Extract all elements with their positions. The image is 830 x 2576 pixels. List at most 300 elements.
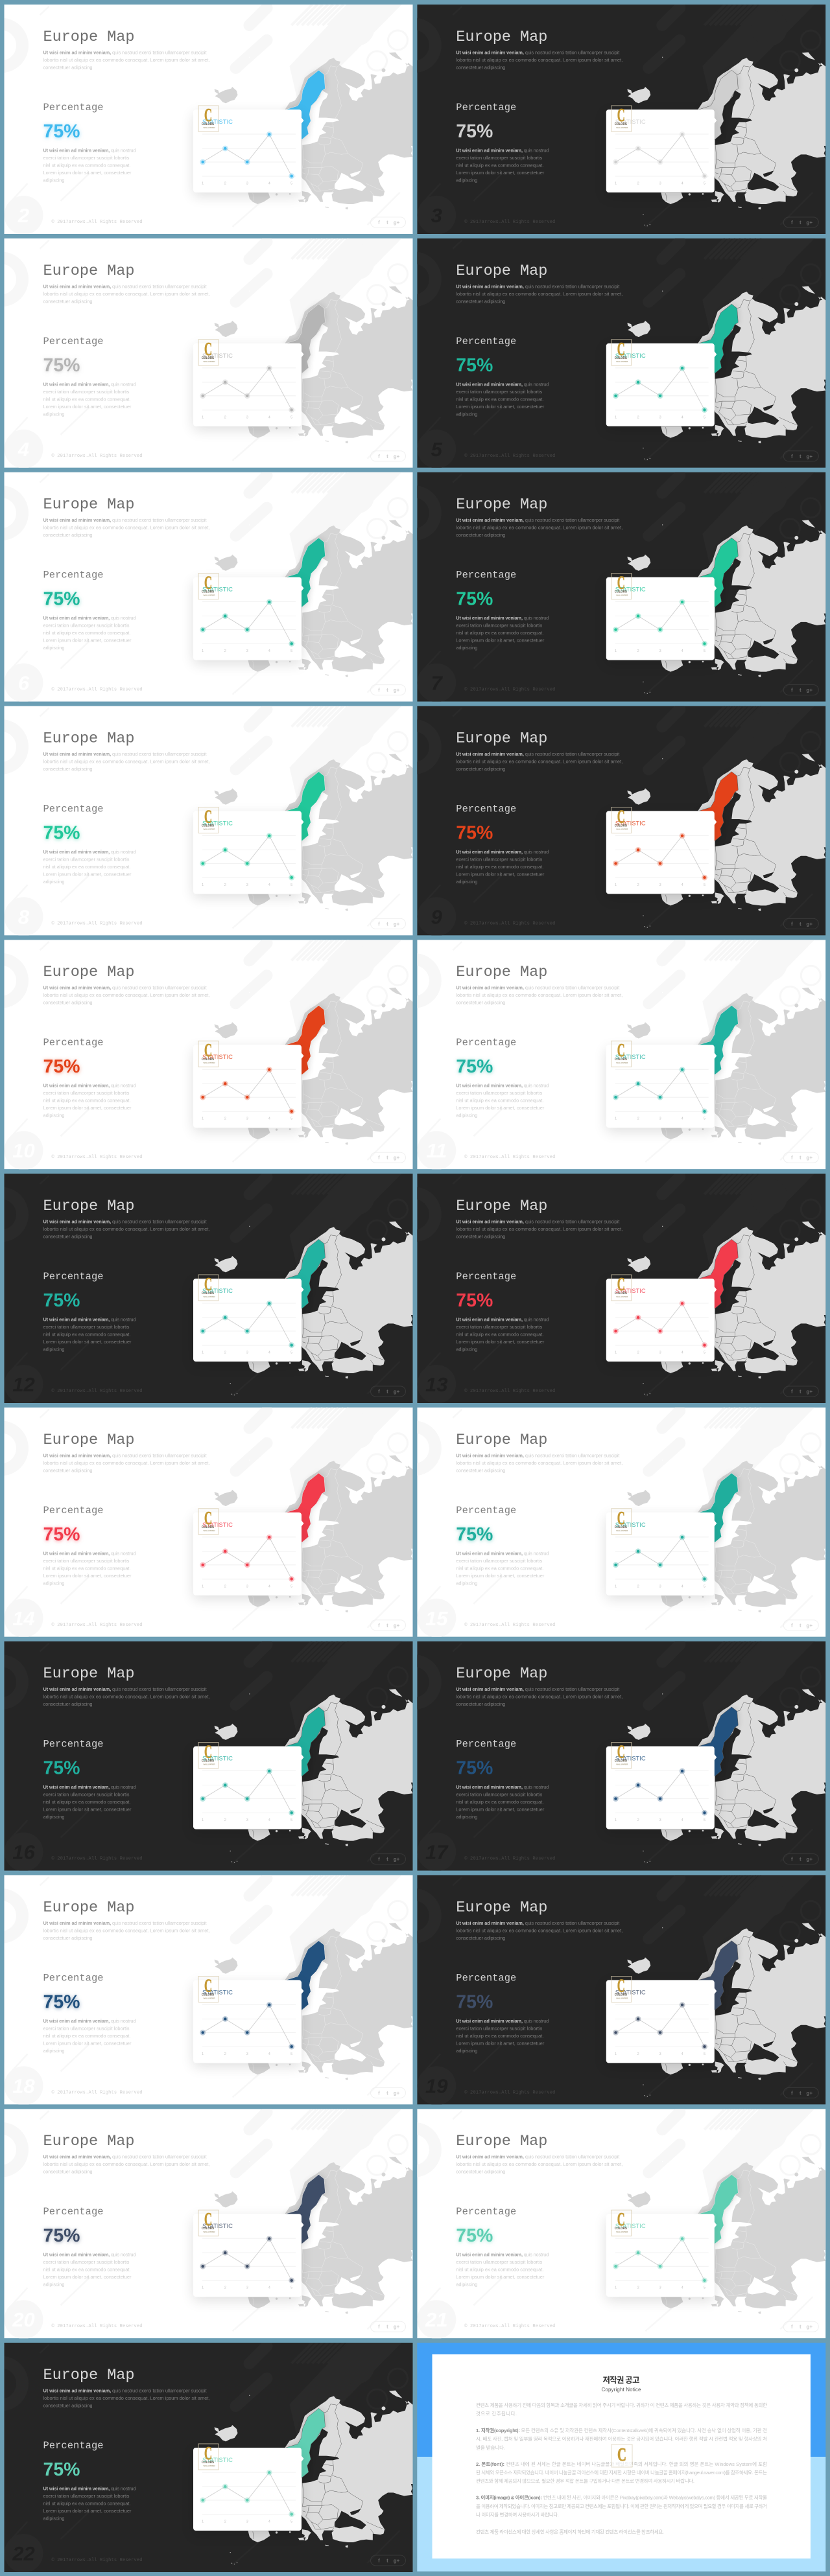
card: statistic chart [193,105,303,196]
social icons: f [791,220,793,226]
intro text: lobortis nisl ut aliquip ex ea commodo consequat. Lorem ipsum dolor sit amet, [43,525,210,531]
card: statistic chart: 3 [246,1351,248,1354]
social icons: f [791,2324,793,2330]
intro text [456,2154,622,2175]
percentage value: 75% [456,589,493,610]
card: statistic chart: 5 [704,2052,706,2056]
card: statistic chart: 3 [246,1818,248,1822]
card: statistic chart: STATISTIC [202,1756,233,1763]
description [43,381,136,417]
card: statistic chart: 1 [615,883,617,887]
intro text: Ut wisi enim ad minim veniam, quis nostrud exerci tation ullamcorper suscipit [43,1686,206,1692]
logo watermark [611,1274,632,1301]
logo watermark: COLORS [615,1759,627,1763]
intro text: Ut wisi enim ad minim veniam, quis nostrud exerci tation ullamcorper suscipit [43,49,206,56]
logo watermark [611,573,632,599]
slide 22: dark, mint [0,2343,413,2573]
slide 6: light, teal [0,472,413,702]
card: statistic chart: 1 [202,2052,204,2056]
description: Ut wisi enim ad minim veniam, quis nostrud [456,2252,549,2258]
card: statistic chart: 5 [290,181,292,185]
intro text: consectetuer adipiscing [456,532,505,538]
social icons: t [386,688,388,693]
social icons: g+ [807,1623,812,1629]
card: statistic chart: 3 [246,181,248,185]
intro text [43,985,210,1006]
page number: 14 [12,1607,35,1630]
description: Lorem ipsum dolor sit amet, consectetuer [43,404,132,410]
notice body text: 나 이미지를 변경하여 사용하시기 바랍니다. [476,2511,559,2518]
subheading: Percentage [43,1505,104,1516]
page number: 7 [431,672,444,695]
logo watermark: WALLPAPER [204,360,215,363]
description: exerci tation ullamcorper suscipit lobortis [456,155,543,161]
intro text: consectetuer adipiscing [456,1234,505,1239]
logo watermark: C [204,1975,212,1996]
description: nisl ut aliquip ex ea commodo consequat. [456,630,543,636]
intro text: Ut wisi enim ad minim veniam, quis nostrud exerci tation ullamcorper suscipit [456,1452,619,1458]
description: exerci tation ullamcorper suscipit lobortis [43,2259,130,2265]
logo watermark: WALLPAPER [616,1997,628,1999]
logo watermark: COLORS [202,2461,215,2465]
card: statistic chart: 5 [290,2052,292,2056]
card: statistic chart: 4 [682,2052,683,2056]
intro text [456,1686,622,1707]
heading: Europe Map [43,496,135,514]
social icons: g+ [807,2324,812,2330]
social icons: t [800,2324,801,2330]
logo watermark: WALLPAPER [616,828,628,830]
description: exerci tation ullamcorper suscipit lobortis [43,623,130,629]
subheading: Percentage [43,1739,104,1750]
slide 14: light, red [0,1408,413,1638]
intro text [456,985,622,1006]
card: statistic chart: STATISTIC [615,1522,646,1529]
description: exerci tation ullamcorper suscipit lobortis [43,856,130,862]
card: statistic chart: 1 [202,883,204,887]
description: exerci tation ullamcorper suscipit lobortis [456,1792,543,1798]
subheading: Percentage [43,336,104,347]
card: statistic chart: 2 [637,415,639,419]
social icons [371,217,406,227]
description: Ut wisi enim ad minim veniam, quis nostrud [43,615,136,621]
footer copyright: © 2017arrows.All Rights Reserved [464,1856,555,1862]
heading: Europe Map [43,29,135,46]
social icons: t [800,2090,801,2096]
description: exerci tation ullamcorper suscipit lobortis [456,856,543,862]
intro text: Ut wisi enim ad minim veniam, quis nostrud exerci tation ullamcorper suscipit [43,2154,206,2160]
logo watermark [198,105,219,132]
heading: Europe Map [456,262,547,280]
card: statistic chart: STATISTIC [202,353,233,360]
percentage value: 75% [456,1524,493,1545]
panel: copyright notice [417,2343,825,2571]
subheading: Percentage [456,570,516,581]
description: nisl ut aliquip ex ea commodo consequat. [456,2033,543,2039]
social icons: t [386,1389,388,1395]
footer copyright: © 2017arrows.All Rights Reserved [464,920,555,926]
social icons: f [791,1155,793,1161]
description [43,2486,136,2521]
icon: Europe map with Sweden highlighted [627,1923,825,2097]
description [456,849,549,885]
intro text: Ut wisi enim ad minim veniam, quis nostrud exerci tation ullamcorper suscipit [43,1218,206,1225]
description [43,1317,136,1352]
description: nisl ut aliquip ex ea commodo consequat. [43,1331,131,1338]
social icons: g+ [807,220,812,226]
heading: Europe Map [43,730,135,747]
intro text [43,283,210,304]
logo watermark: WALLPAPER [616,1763,628,1766]
social icons [371,685,406,695]
logo watermark: C [204,573,212,594]
social icons: f [791,1623,793,1629]
intro text: consectetuer adipiscing [43,65,92,70]
logo watermark: COLORS [202,122,215,126]
social icons: f [378,2324,380,2330]
card: statistic chart: 1 [615,1584,617,1588]
page number: 13 [425,1373,448,1396]
card: statistic chart: 4 [268,1117,270,1121]
page number: 8 [18,905,30,928]
card: statistic chart [606,339,717,430]
percentage value: 75% [43,1524,80,1545]
description: exerci tation ullamcorper suscipit lobortis [456,2259,543,2265]
social icons: f [378,2090,380,2096]
logo watermark: C [204,2443,212,2464]
card: statistic chart: 4 [268,649,270,653]
logo watermark: C [204,1742,212,1763]
icon: Europe map with Sweden highlighted [627,754,825,928]
description: Ut wisi enim ad minim veniam, quis nostrud [43,1784,136,1790]
card: statistic chart: STATISTIC [615,586,646,594]
notice subheading: Copyright Notice [602,2387,641,2393]
social icons [783,1854,818,1864]
description: Ut wisi enim ad minim veniam, quis nostrud [43,2018,136,2024]
card: statistic chart [193,1274,303,1365]
logo watermark [198,2209,219,2236]
card: statistic chart [606,1742,717,1833]
card: statistic chart: 2 [224,1351,226,1354]
card: statistic chart: 3 [659,2286,661,2290]
description [456,1317,549,1352]
intro text: consectetuer adipiscing [456,1935,505,1941]
social icons: f [378,688,380,693]
description: Ut wisi enim ad minim veniam, quis nostrud [43,148,136,153]
logo watermark [198,1508,219,1535]
icon: Europe map with Sweden highlighted [215,754,413,928]
description: nisl ut aliquip ex ea commodo consequat. [43,1098,131,1104]
card: statistic chart: 3 [246,2286,248,2290]
social icons: g+ [394,2324,400,2330]
logo watermark [198,806,219,833]
icon: Europe map with Sweden highlighted [215,2157,413,2331]
card: statistic chart: 4 [268,2520,270,2524]
card: statistic chart: 5 [290,2520,292,2524]
intro text: lobortis nisl ut aliquip ex ea commodo consequat. Lorem ipsum dolor sit amet, [43,758,210,764]
page number: 9 [431,905,443,928]
percentage value: 75% [456,1290,493,1311]
description: Lorem ipsum dolor sit amet, consectetuer [456,170,545,176]
card: statistic chart: 1 [615,415,617,419]
social icons: f [378,1389,380,1395]
description: Lorem ipsum dolor sit amet, consectetuer [43,1105,132,1111]
intro text: lobortis nisl ut aliquip ex ea commodo consequat. Lorem ipsum dolor sit amet, [43,2395,210,2401]
subheading: Percentage [456,336,516,347]
description: Ut wisi enim ad minim veniam, quis nostrud [456,148,549,153]
intro text [43,1920,210,1941]
card: statistic chart: STATISTIC [615,1288,646,1295]
page number: 15 [425,1607,448,1630]
page number: 2 [18,204,29,227]
description: Lorem ipsum dolor sit amet, consectetuer [43,1807,132,1813]
intro text: consectetuer adipiscing [456,65,505,70]
description: adipiscing [43,1580,65,1586]
intro text: Ut wisi enim ad minim veniam, quis nostrud exerci tation ullamcorper suscipit [456,1920,619,1926]
heading: Europe Map [456,2133,547,2150]
intro text: Ut wisi enim ad minim veniam, quis nostrud exerci tation ullamcorper suscipit [43,2387,206,2394]
card: statistic chart: 2 [224,1117,226,1121]
logo watermark: C [617,806,625,827]
heading: Europe Map [43,2367,135,2384]
card: statistic chart: 4 [268,415,270,419]
logo watermark: WALLPAPER [204,1062,215,1064]
subheading: Percentage [43,1037,104,1049]
logo watermark: WALLPAPER [204,1997,215,1999]
logo watermark: C [204,1274,212,1295]
description: adipiscing [456,2282,477,2288]
card: statistic chart: STATISTIC [615,353,646,360]
percentage value: 75% [43,2459,80,2480]
percentage value: 75% [43,1056,80,1077]
notice body text: 컨텐츠와 함께 제공되지 않으므로, 필요한 경우 적합 폰트를 구입하거나 다른 폰트로 변경하여 사용하시기 바랍니다. [476,2477,694,2484]
subheading: Percentage [43,1271,104,1282]
percentage value: 75% [456,1991,493,2012]
description: Ut wisi enim ad minim veniam, quis nostrud [43,2252,136,2258]
description: exerci tation ullamcorper suscipit lobortis [456,1324,543,1330]
description: exerci tation ullamcorper suscipit lobortis [456,1558,543,1564]
intro text: Ut wisi enim ad minim veniam, quis nostrud exerci tation ullamcorper suscipit [456,1218,619,1225]
social icons: t [800,1623,801,1629]
intro text: lobortis nisl ut aliquip ex ea commodo consequat. Lorem ipsum dolor sit amet, [456,758,622,764]
footer copyright: © 2017arrows.All Rights Reserved [464,1388,555,1394]
icon: Europe map with Sweden highlighted [627,988,825,1162]
social icons: g+ [394,220,400,226]
footer copyright: © 2017arrows.All Rights Reserved [464,2089,555,2095]
card: statistic chart: 2 [637,1584,639,1588]
social icons: f [791,1857,793,1862]
social icons [371,2087,406,2098]
notice body text: 된 서체와 오픈소스 제작되었습니다. 네이버 나눔글꼴 라이선스에 대한 자세한 사항은 네이버 나눔글꼴 홈페이지(hangeul.naver.com)를 참조하세요. 폰트는 [476,2469,767,2476]
card: statistic chart: 4 [682,2286,683,2290]
intro text: consectetuer adipiscing [43,1000,92,1006]
heading: Europe Map [456,1432,547,1449]
description [43,615,136,651]
description: exerci tation ullamcorper suscipit lobortis [456,1090,543,1096]
logo watermark [611,1742,632,1769]
intro text: consectetuer adipiscing [43,1234,92,1239]
percentage value: 75% [43,121,80,142]
description: adipiscing [43,1113,65,1119]
description: Lorem ipsum dolor sit amet, consectetuer [43,2040,132,2046]
slide 18: light, blue [0,1875,413,2105]
card: statistic chart: 5 [704,181,706,185]
page number: 11 [426,1139,447,1162]
description: Lorem ipsum dolor sit amet, consectetuer [43,1339,132,1345]
description: adipiscing [456,1347,477,1352]
description: exerci tation ullamcorper suscipit lobortis [43,2025,130,2031]
social icons: t [386,2558,388,2564]
logo watermark: WALLPAPER [616,360,628,363]
card: statistic chart: 2 [224,2286,226,2290]
social icons: t [386,1857,388,1862]
social icons [783,217,818,227]
social icons: t [800,688,801,693]
logo watermark: C [204,1508,212,1529]
footer copyright: © 2017arrows.All Rights Reserved [52,1622,143,1628]
description: Ut wisi enim ad minim veniam, quis nostrud [43,1317,136,1322]
card: statistic chart: 1 [615,1117,617,1121]
description [456,148,549,183]
heading: Europe Map [456,1198,547,1215]
logo watermark: COLORS [615,2227,627,2231]
logo watermark [611,105,632,132]
card: statistic chart: 3 [246,883,248,887]
logo watermark: COLORS [202,590,215,594]
page number: 5 [431,438,443,461]
card: statistic chart: 3 [659,1351,661,1354]
footer copyright: © 2017arrows.All Rights Reserved [52,2323,143,2329]
logo watermark: WALLPAPER [204,2465,215,2467]
intro text: lobortis nisl ut aliquip ex ea commodo consequat. Lorem ipsum dolor sit amet, [456,1460,622,1466]
logo watermark: WALLPAPER [204,1529,215,1532]
card: statistic chart: 1 [615,181,617,185]
footer copyright: © 2017arrows.All Rights Reserved [464,453,555,459]
heading: Europe Map [43,262,135,280]
social icons: g+ [394,1857,400,1862]
card: statistic chart: 4 [268,2286,270,2290]
description: adipiscing [43,1347,65,1352]
footer copyright: © 2017arrows.All Rights Reserved [464,219,555,225]
card: statistic chart: 2 [224,181,226,185]
logo watermark [198,1975,219,2002]
card: statistic chart: 4 [682,181,683,185]
social icons: g+ [394,454,400,459]
intro text: Ut wisi enim ad minim veniam, quis nostrud exerci tation ullamcorper suscipit [43,751,206,757]
description: Ut wisi enim ad minim veniam, quis nostrud [43,2486,136,2491]
notice body text: 컨텐츠 제품을 사용하기 전에 다음의 항목과 소개글을 자세히 읽어 주시기 바랍니다. 귀하가 이 컨텐츠 제품을 사용하는 것은 사용자 계약과 정책에 동의한 [476,2402,767,2408]
icon: Europe map with Sweden highlighted [215,1222,413,1395]
social icons [783,1386,818,1397]
logo watermark [198,339,219,366]
subheading: Percentage [456,2206,516,2218]
page number: 6 [18,672,30,695]
icon: Europe map with Sweden highlighted [215,520,413,694]
intro text: Ut wisi enim ad minim veniam, quis nostrud exerci tation ullamcorper suscipit [456,1686,619,1692]
social icons: g+ [394,2090,400,2096]
intro text: lobortis nisl ut aliquip ex ea commodo consequat. Lorem ipsum dolor sit amet, [43,992,210,998]
intro text: Ut wisi enim ad minim veniam, quis nostrud exerci tation ullamcorper suscipit [456,517,619,523]
card: statistic chart: 2 [637,1351,639,1354]
card: statistic chart: 4 [682,415,683,419]
description: exerci tation ullamcorper suscipit lobortis [43,1558,130,1564]
description: exerci tation ullamcorper suscipit lobortis [43,1090,130,1096]
card: statistic chart: 1 [615,2286,617,2290]
card: statistic chart: 1 [202,1584,204,1588]
intro text: consectetuer adipiscing [43,1935,92,1941]
card: statistic chart: STATISTIC [202,820,233,827]
description: adipiscing [456,2048,477,2054]
card: statistic chart: 1 [615,2052,617,2056]
logo watermark: COLORS [615,590,627,594]
icon: Europe map with Sweden highlighted [627,286,825,460]
intro text: consectetuer adipiscing [43,1467,92,1473]
card: statistic chart [606,1508,717,1599]
description: Ut wisi enim ad minim veniam, quis nostrud [456,615,549,621]
card: statistic chart: STATISTIC [615,1756,646,1763]
card: statistic chart: 5 [704,1584,706,1588]
description: Lorem ipsum dolor sit amet, consectetuer [43,871,132,877]
logo watermark: COLORS [615,1292,627,1295]
social icons: g+ [394,2558,400,2564]
card: statistic chart: 2 [637,883,639,887]
logo watermark [198,1742,219,1769]
logo watermark: COLORS [202,824,215,828]
logo watermark: COLORS [202,1993,215,1997]
card: statistic chart: 5 [290,1818,292,1822]
social icons [783,918,818,929]
page number: 12 [12,1373,35,1396]
percentage value: 75% [43,1290,80,1311]
intro text [456,517,622,538]
social icons: t [386,921,388,927]
social icons: t [800,1857,801,1862]
intro text: lobortis nisl ut aliquip ex ea commodo consequat. Lorem ipsum dolor sit amet, [43,1694,210,1700]
heading: Europe Map [43,2133,135,2150]
logo watermark: WALLPAPER [204,1295,215,1298]
intro text: lobortis nisl ut aliquip ex ea commodo consequat. Lorem ipsum dolor sit amet, [456,1694,622,1700]
intro text: consectetuer adipiscing [43,532,92,538]
description: Lorem ipsum dolor sit amet, consectetuer [456,2040,545,2046]
logo watermark [611,2444,632,2467]
subheading: Percentage [43,102,104,113]
description [43,1083,136,1119]
icon: Europe map with Sweden highlighted [215,52,413,226]
logo watermark: COLORS [615,1993,627,1997]
description [43,1784,136,1820]
social icons [783,2087,818,2098]
card: statistic chart: 3 [246,2052,248,2056]
intro text: consectetuer adipiscing [456,1701,505,1707]
description: nisl ut aliquip ex ea commodo consequat. [43,162,131,168]
slide 21: light, mint [392,2109,825,2339]
card: statistic chart: 5 [704,1351,706,1354]
intro text: consectetuer adipiscing [43,2403,92,2408]
intro text: lobortis nisl ut aliquip ex ea commodo consequat. Lorem ipsum dolor sit amet, [43,57,210,63]
intro text: Ut wisi enim ad minim veniam, quis nostrud exerci tation ullamcorper suscipit [43,985,206,991]
card: statistic chart: 3 [246,2520,248,2524]
description [43,2018,136,2054]
description [456,2252,549,2288]
social icons [371,1854,406,1864]
slide 8: light, green [0,706,413,936]
description: adipiscing [456,879,477,885]
description: adipiscing [456,645,477,651]
card: statistic chart: STATISTIC [202,119,233,126]
subheading: Percentage [43,2440,104,2452]
card: statistic chart [193,573,303,664]
footer copyright: © 2017arrows.All Rights Reserved [464,687,555,693]
